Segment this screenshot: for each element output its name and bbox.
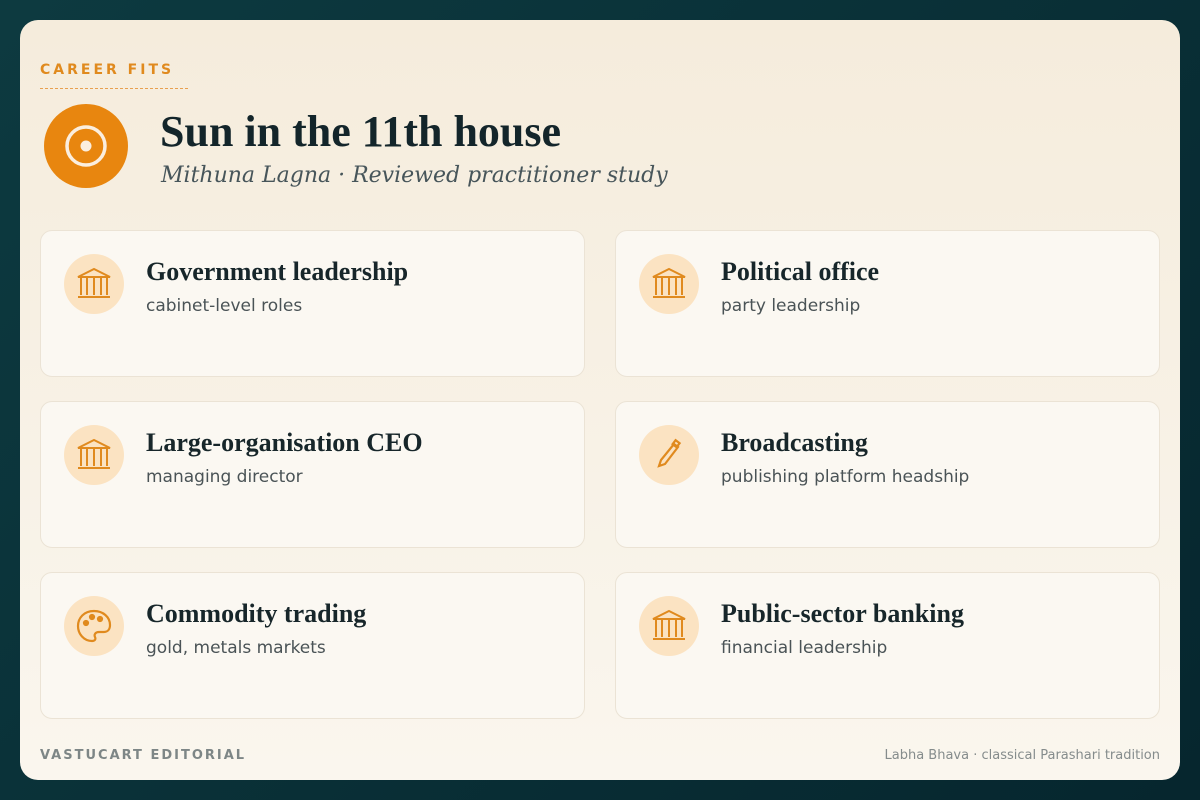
icon: sun [44,104,128,188]
card: Broadcasting [615,401,1160,548]
card: Political office: Political office [721,257,879,286]
icon: institution [639,254,699,314]
card: Large-organisation CEO: managing director [146,467,303,487]
card: Public-sector banking [615,572,1160,719]
card: Government leadership [40,230,585,377]
card: Large-organisation CEO: Large-organisation CEO [146,428,423,457]
eyebrow label [40,62,188,89]
icon: institution [64,425,124,485]
title: Sun in the 11th house [160,107,561,156]
card: Broadcasting: Broadcasting [721,428,868,457]
card: Large-organisation CEO [40,401,585,548]
card: Commodity trading: gold, metals markets [146,638,326,658]
card: Commodity trading [40,572,585,719]
subtitle: Mithuna Lagna · Reviewed practitioner study [161,163,668,188]
eyebrow label: CAREER FITS [40,62,174,78]
card: Public-sector banking: financial leadership [721,638,887,658]
footer: source note: Labha Bhava · classical Parashari tradition [884,748,1160,763]
footer: brand: VASTUCART EDITORIAL [40,748,246,763]
card: Public-sector banking: Public-sector banking [721,599,964,628]
card: Broadcasting: publishing platform headship [721,467,969,487]
icon: pen [639,425,699,485]
card: Political office [615,230,1160,377]
icon: palette [64,596,124,656]
icon: institution [64,254,124,314]
card: Government leadership: Government leadership [146,257,408,286]
card: Commodity trading: Commodity trading [146,599,366,628]
card: Government leadership: cabinet-level roles [146,296,302,316]
icon: institution [639,596,699,656]
card: Political office: party leadership [721,296,860,316]
